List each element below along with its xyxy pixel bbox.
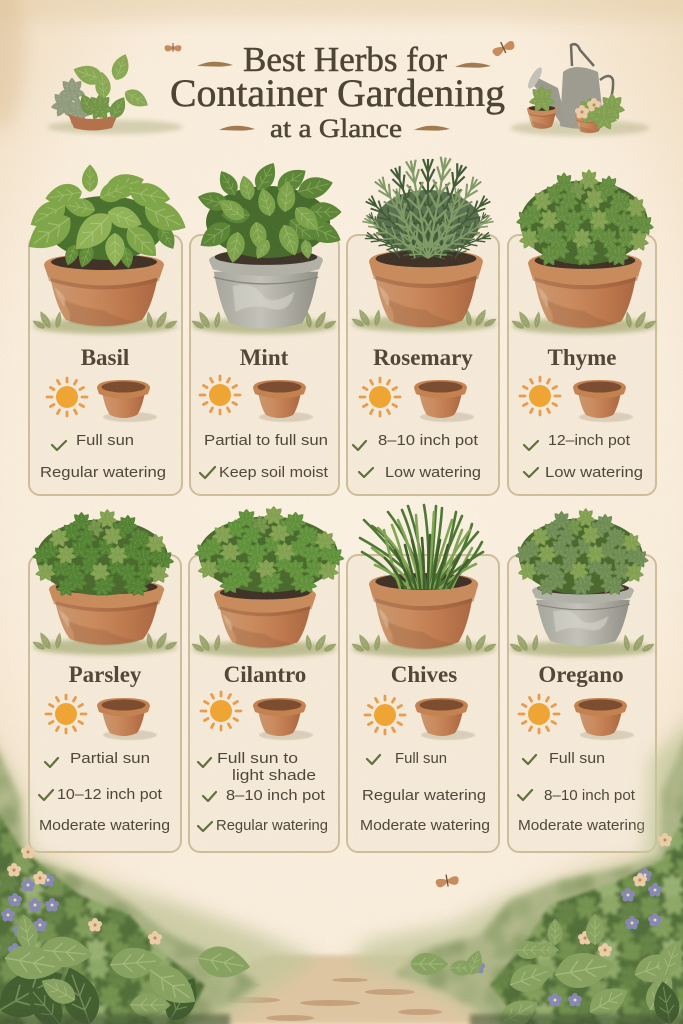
text: pot size: 10–12 inch pot bbox=[57, 786, 163, 803]
pot: chives bbox=[369, 573, 478, 650]
icon: small pot bbox=[414, 380, 474, 422]
panel: chives bbox=[347, 505, 499, 852]
icon: sun bbox=[47, 378, 87, 416]
check bbox=[524, 468, 538, 477]
text: pot size: 8–10 inch pot bbox=[378, 432, 479, 449]
pot: thyme bbox=[528, 252, 642, 329]
icon: sun bbox=[520, 377, 560, 415]
check bbox=[518, 790, 532, 800]
text: sun needs: Partial sun bbox=[70, 750, 150, 767]
check bbox=[524, 441, 538, 450]
icon: small pot bbox=[97, 380, 157, 422]
name: parsley: Parsley bbox=[69, 662, 142, 687]
name: cilantro: Cilantro bbox=[224, 662, 306, 687]
pot: basil bbox=[44, 254, 164, 327]
check bbox=[353, 441, 366, 450]
text: sun needs line 2: light shade bbox=[232, 767, 316, 784]
pot: parsley bbox=[49, 580, 164, 646]
text: sun needs: Full sun bbox=[549, 750, 605, 767]
pot: oregano bbox=[532, 582, 634, 646]
pot: mint bbox=[209, 249, 323, 329]
panel: parsley bbox=[29, 509, 181, 852]
check bbox=[203, 792, 216, 801]
text: watering: Moderate watering bbox=[360, 817, 490, 834]
plant: cilantro bbox=[194, 506, 345, 594]
foliage: bottom left bbox=[0, 720, 320, 1024]
icon: sun bbox=[360, 378, 400, 416]
icon: small pot bbox=[97, 698, 157, 740]
icon: small pot bbox=[253, 698, 313, 740]
text: sun needs: Full sun to bbox=[217, 750, 298, 767]
pot: cilantro bbox=[214, 586, 316, 648]
title bbox=[170, 40, 505, 143]
text: pot size: 8–10 inch pot bbox=[544, 787, 636, 804]
panel: oregano bbox=[508, 508, 656, 852]
icon: small pot bbox=[574, 698, 634, 740]
text: watering: Low watering bbox=[385, 464, 481, 481]
check bbox=[52, 441, 66, 450]
text: watering: Moderate watering bbox=[518, 817, 645, 834]
panel: cilantro bbox=[189, 506, 345, 852]
foliage: bottom right bbox=[345, 700, 683, 1024]
name: mint: Mint bbox=[240, 345, 289, 370]
text: pot size: 12–inch pot bbox=[548, 432, 631, 449]
title flourishes bbox=[197, 62, 491, 131]
plant: parsley bbox=[32, 509, 175, 597]
icon: sun bbox=[201, 692, 241, 730]
plant: thyme bbox=[516, 169, 654, 267]
icon: small pot bbox=[253, 380, 313, 422]
text: pot size: 8–10 inch pot bbox=[226, 787, 326, 804]
name: oregano: Oregano bbox=[538, 662, 624, 687]
text: watering: Regular watering bbox=[216, 817, 328, 834]
plant: basil bbox=[20, 164, 192, 270]
icon: small pot bbox=[573, 380, 633, 422]
plant: chives bbox=[360, 505, 483, 588]
header: watering can and pots bbox=[510, 44, 650, 136]
text: sun needs: Partial to full sun bbox=[204, 432, 328, 449]
text: sun needs: Full sun bbox=[76, 432, 134, 449]
panel: thyme bbox=[508, 169, 658, 495]
plant: mint bbox=[195, 158, 345, 264]
plant: oregano bbox=[515, 508, 649, 596]
title line 2: Container Gardening bbox=[170, 72, 505, 115]
garden path bbox=[180, 955, 530, 1024]
name: rosemary: Rosemary bbox=[373, 345, 473, 370]
check bbox=[39, 790, 53, 800]
title line 3: at a Glance bbox=[270, 114, 402, 143]
panel: rosemary bbox=[347, 156, 499, 495]
text: watering: Moderate watering bbox=[39, 817, 170, 834]
icon: sun bbox=[365, 696, 405, 734]
plant: rosemary bbox=[360, 156, 496, 264]
check bbox=[200, 467, 215, 478]
check bbox=[523, 755, 536, 764]
header: left potted plant bbox=[47, 51, 183, 134]
check bbox=[45, 758, 58, 767]
icon: small pot bbox=[415, 698, 475, 740]
name: chives: Chives bbox=[391, 662, 457, 687]
text: watering: Low watering bbox=[545, 464, 643, 481]
icon: sun bbox=[519, 695, 559, 733]
check bbox=[198, 822, 212, 831]
text: watering: Regular watering bbox=[40, 464, 166, 481]
icon: sun bbox=[200, 376, 240, 414]
icon: sun bbox=[46, 695, 86, 733]
check bbox=[198, 758, 211, 767]
name: basil: Basil bbox=[81, 345, 129, 370]
check bbox=[359, 468, 373, 477]
title line 1: Best Herbs for bbox=[243, 40, 447, 79]
pot: rosemary bbox=[369, 250, 483, 328]
header: left butterfly bbox=[165, 43, 181, 52]
text: watering: Keep soil moist bbox=[219, 464, 329, 481]
header: right butterfly bbox=[490, 37, 516, 58]
check bbox=[367, 755, 380, 764]
name: thyme: Thyme bbox=[548, 345, 616, 370]
bottom butterfly bbox=[435, 873, 460, 889]
text: sun needs: Full sun bbox=[395, 750, 447, 767]
text: second line: Regular watering bbox=[362, 787, 486, 804]
panel: mint bbox=[190, 158, 345, 495]
panel: basil bbox=[20, 164, 192, 495]
